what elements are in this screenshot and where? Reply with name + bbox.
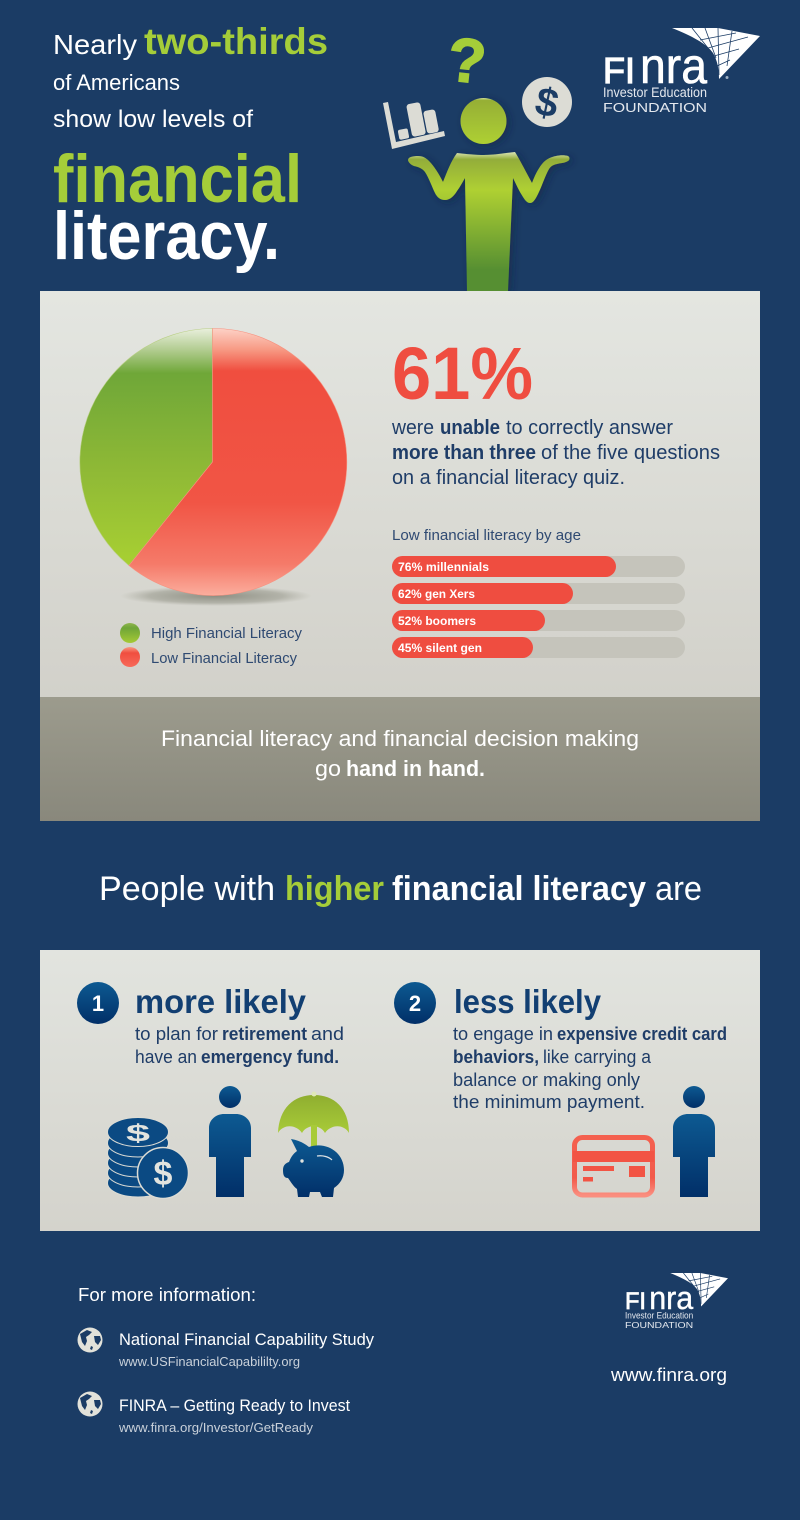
badge: number 1: 1 xyxy=(92,991,104,1016)
banner: hand in hand: go xyxy=(315,756,341,781)
link: National Financial Capability Study xyxy=(118,1330,374,1369)
heading: less likely: less likely xyxy=(454,983,602,1020)
heading: people with higher financial literacy: financial literacy xyxy=(392,870,646,908)
logo: FINRA Investor Education Foundation: Investor Education xyxy=(603,85,707,100)
icon: person xyxy=(209,1086,251,1197)
bar chart: low literacy by age: 45% silent gen xyxy=(398,641,482,655)
link: FINRA Getting Ready to Invest: FINRA – Getting Ready to Invest xyxy=(119,1396,350,1415)
icon: stack of coins xyxy=(108,1118,188,1198)
text: credit card behaviors xyxy=(453,1024,727,1112)
badge: number 1 xyxy=(77,982,119,1024)
banner: hand in hand: Financial literacy and financial decision making xyxy=(161,726,639,751)
icon: dollar coin: $ xyxy=(531,79,562,127)
logo: FINRA footer xyxy=(625,1273,728,1330)
bar chart: low literacy by age: Low financial literacy by age xyxy=(392,527,581,544)
big number: 61 percent: 61% xyxy=(392,332,533,415)
heading: more likely: more likely xyxy=(135,983,307,1020)
text: credit card behaviors: like carrying a xyxy=(543,1047,652,1067)
logo: FINRA footer: Investor Education xyxy=(625,1310,693,1320)
headline: two-thirds xyxy=(144,21,328,62)
text: quiz finding: were xyxy=(391,417,434,439)
text: quiz finding: unable xyxy=(440,417,500,439)
icon: globe xyxy=(78,1392,102,1416)
legend xyxy=(120,623,302,667)
icon: piggy bank under umbrella xyxy=(278,1092,349,1197)
bar chart: low literacy by age: 52% boomers xyxy=(398,614,476,628)
legend: High Financial Literacy xyxy=(151,625,302,642)
banner: hand in hand: hand in hand. xyxy=(346,756,485,781)
headline: Nearly xyxy=(53,29,137,60)
logo: FINRA Investor Education Foundation: FOUNDATION xyxy=(603,100,707,115)
icon: stack of coins: $ xyxy=(126,1120,151,1147)
logo: FINRA Investor Education Foundation: nra xyxy=(640,38,707,94)
heading: people with higher financial literacy: People with xyxy=(99,870,275,908)
headline: show low levels of xyxy=(53,106,253,133)
link: FINRA Getting Ready to Invest xyxy=(118,1396,350,1435)
icon: question mark: ? xyxy=(444,25,489,98)
panel: 61 percent statistics xyxy=(40,291,760,697)
logo: FINRA Investor Education Foundation: FI xyxy=(603,50,635,91)
headline: literacy. xyxy=(53,198,280,274)
text: credit card behaviors: balance or making only xyxy=(453,1070,640,1090)
footer heading: For more information: xyxy=(78,1285,256,1305)
link: National Financial Capability Study: National Financial Capability Study xyxy=(119,1330,374,1349)
heading: people with higher financial literacy: higher xyxy=(285,870,384,908)
bar chart: low literacy by age: 76% millennials xyxy=(398,560,489,574)
link: National Financial Capability Study: www.USFinancialCapabililty.org xyxy=(118,1354,300,1369)
text: credit card behaviors: behaviors, xyxy=(453,1047,539,1067)
bar chart: low literacy by age xyxy=(392,527,685,658)
badge: number 2 xyxy=(394,982,436,1024)
figure: shrugging person xyxy=(408,98,570,291)
text: quiz finding xyxy=(391,417,720,489)
headline: financial xyxy=(53,141,302,217)
logo: FINRA Investor Education Foundation xyxy=(603,28,760,115)
link: finra.org: www.finra.org xyxy=(610,1365,727,1385)
pie chart: 61 percent low literacy xyxy=(80,328,347,606)
icon: bar chart xyxy=(383,102,445,149)
bar chart: low literacy by age: 62% gen Xers xyxy=(398,587,475,601)
headline: of Americans xyxy=(53,70,180,95)
text: quiz finding: of the five questions xyxy=(541,442,720,464)
text: retirement and emergency fund: retirement xyxy=(222,1024,307,1044)
text: retirement and emergency fund: have an xyxy=(135,1047,197,1067)
logo: FINRA footer: nra xyxy=(649,1279,694,1316)
text: credit card behaviors: expensive credit card xyxy=(557,1024,727,1044)
text: retirement and emergency fund: emergency fund. xyxy=(201,1047,339,1067)
panel: more likely and less likely xyxy=(40,950,760,1231)
logo: FINRA footer: FOUNDATION xyxy=(625,1320,693,1330)
heading: people with higher financial literacy: are xyxy=(655,870,702,908)
icon: credit card xyxy=(573,1138,654,1195)
badge: number 2: 2 xyxy=(409,991,421,1016)
icon: dollar coin xyxy=(522,77,572,127)
text: retirement and emergency fund: and xyxy=(311,1024,344,1044)
icon: stack of coins: $ xyxy=(154,1155,173,1193)
headline xyxy=(53,21,328,274)
icon: globe xyxy=(78,1328,102,1352)
link: FINRA Getting Ready to Invest: www.finra.org/Investor/GetReady xyxy=(118,1420,314,1435)
banner: hand in hand xyxy=(40,697,760,821)
heading: people with higher financial literacy xyxy=(99,870,702,908)
text: retirement and emergency fund xyxy=(135,1024,344,1067)
text: quiz finding: to correctly answer xyxy=(506,417,673,439)
icon: person xyxy=(673,1086,715,1197)
text: quiz finding: more than three xyxy=(392,442,536,464)
text: quiz finding: on a financial literacy quiz. xyxy=(392,467,625,489)
text: credit card behaviors: the minimum payment. xyxy=(453,1092,645,1112)
logo: FINRA footer: FI xyxy=(625,1289,646,1315)
text: credit card behaviors: to engage in xyxy=(453,1024,553,1044)
text: retirement and emergency fund: to plan for xyxy=(135,1024,218,1044)
legend: Low Financial Literacy xyxy=(151,650,297,667)
